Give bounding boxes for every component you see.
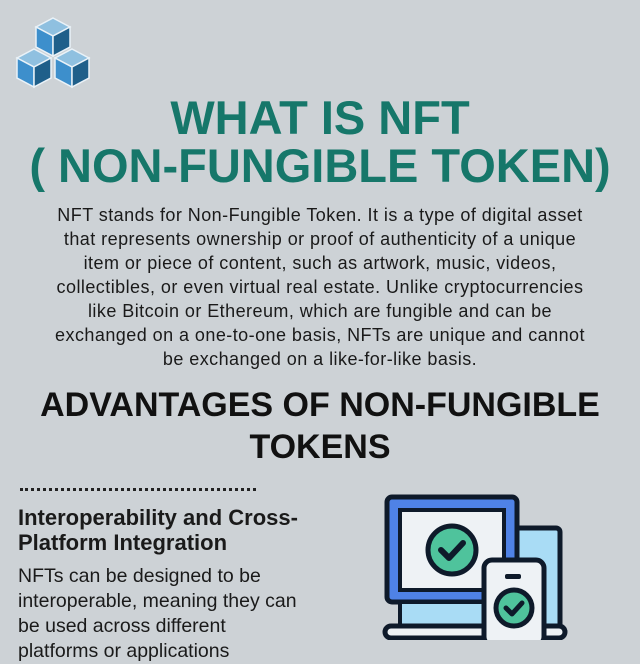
section heading: ADVANTAGES OF NON-FUNGIBLE bbox=[40, 386, 600, 424]
intro paragraph: be exchanged on a like-for-like basis. bbox=[163, 349, 477, 369]
logo: cubes bbox=[16, 17, 90, 88]
section heading: TOKENS bbox=[249, 428, 391, 466]
subheading bbox=[18, 505, 298, 555]
intro paragraph: collectibles, or even virtual real estate. Unlike cryptocurrencies bbox=[57, 277, 583, 297]
body text: be used across different bbox=[18, 615, 226, 637]
body text: platforms or applications bbox=[18, 640, 229, 662]
intro paragraph: NFT stands for Non-Fungible Token. It is a type of digital asset bbox=[57, 205, 583, 225]
body text: NFTs can be designed to be bbox=[18, 565, 261, 587]
body text: interoperable, meaning they can bbox=[18, 590, 297, 612]
body text bbox=[18, 565, 297, 662]
intro paragraph bbox=[55, 205, 585, 369]
section heading bbox=[40, 386, 600, 466]
intro paragraph: exchanged on a one-to-one basis, NFTs are unique and cannot bbox=[55, 325, 585, 345]
title: WHAT IS NFT bbox=[170, 91, 470, 144]
intro paragraph: that represents ownership or proof of authenticity of a unique bbox=[64, 229, 576, 249]
title bbox=[29, 91, 611, 192]
subheading: Interoperability and Cross- bbox=[18, 505, 298, 530]
subheading: Platform Integration bbox=[18, 530, 227, 555]
intro paragraph: like Bitcoin or Ethereum, which are fungible and can be bbox=[88, 301, 552, 321]
title: ( NON-FUNGIBLE TOKEN) bbox=[29, 139, 611, 192]
intro paragraph: item or piece of content, such as artwork, music, videos, bbox=[84, 253, 556, 273]
icon: devices with check bbox=[382, 494, 568, 640]
